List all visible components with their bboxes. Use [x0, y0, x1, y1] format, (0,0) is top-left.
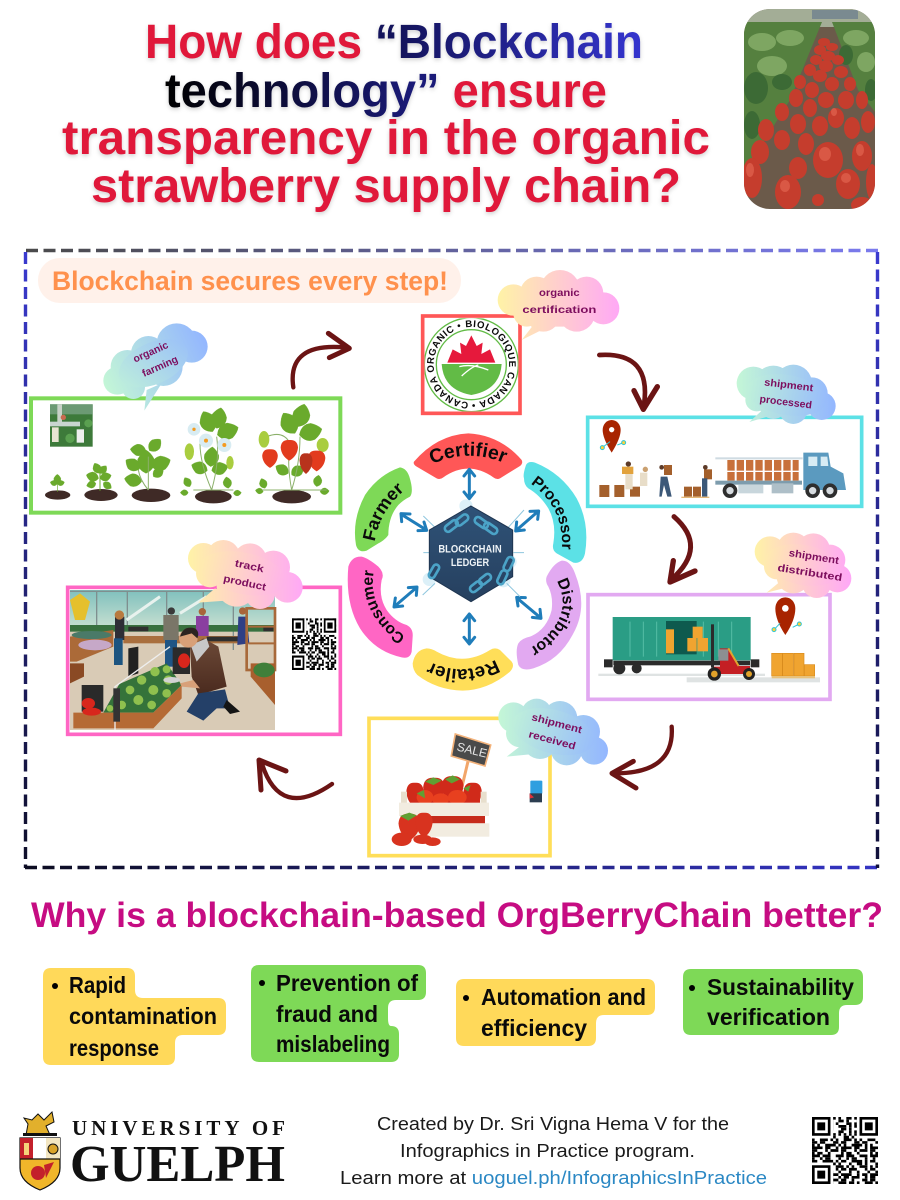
segment: Certifier: Certifier — [430, 442, 508, 462]
icon: strawberry growth stages — [45, 402, 330, 503]
icon: location pin — [600, 420, 626, 453]
icon: delivery truck — [715, 453, 846, 498]
heading: why better: Why is a blockchain-based OrgBerryChain better? — [31, 896, 883, 935]
benefit: prevention of fraud and mislabeling: mislabeling — [276, 1031, 390, 1057]
callout: track product — [188, 540, 303, 609]
segment: Distributor: Distributor — [532, 578, 574, 656]
icon: rail car — [598, 617, 820, 682]
callout: organic certification: organic — [539, 288, 580, 299]
panel: distributor step — [588, 595, 830, 699]
callout: shipment processed: processed — [759, 394, 812, 412]
callout: shipment distributed — [755, 533, 851, 598]
benefit: sustainability verification — [683, 969, 863, 1035]
callout: shipment processed — [737, 365, 836, 424]
benefit: rapid contamination response — [43, 968, 226, 1065]
panel: processor step — [588, 417, 862, 506]
icon: strawberry crate with sale sign: SALE — [455, 740, 489, 761]
callout: track product: product — [222, 574, 267, 594]
panel: consumer step — [68, 587, 340, 734]
banner: blockchain secures every step: Blockchain secures every step! — [52, 266, 448, 296]
benefit: rapid contamination response: contamination — [69, 1003, 217, 1029]
segment: Farmer: Farmer — [362, 483, 402, 541]
icon: strawberry crate with sale sign — [392, 734, 491, 846]
arrow: certifier to processor — [599, 355, 657, 409]
title: strawberry supply chain? — [91, 160, 681, 213]
callout: organic farming: farming — [141, 354, 180, 380]
benefit: automation and efficiency: efficiency — [481, 1015, 587, 1041]
title: technology” ensure — [165, 65, 607, 118]
icon: double-headed arrows — [394, 469, 541, 644]
benefit: rapid contamination response: response — [69, 1035, 159, 1061]
panel: dashed supply chain frame — [25, 250, 878, 868]
icon: forklift — [708, 624, 755, 681]
banner: blockchain secures every step — [38, 258, 461, 303]
callout: organic farming — [103, 323, 208, 411]
icon: Canada Organic logo: CANADA ORGANIC • BIOLOGIQUE CANADA • — [426, 320, 516, 408]
segment: Farmer — [354, 467, 412, 552]
benefit: prevention of fraud and mislabeling: Prevention of — [276, 970, 418, 996]
logo: University of Guelph — [20, 1112, 285, 1193]
icon: blockchain ledger hexagon: BLOCKCHAIN — [438, 544, 502, 556]
icon: QR code — [292, 618, 336, 670]
benefit: automation and efficiency: Automation and — [481, 984, 646, 1010]
panel: farmer step — [31, 398, 340, 513]
arrow: distributor to retailer — [612, 727, 672, 788]
callout: shipment received: shipment — [530, 712, 584, 736]
segment: Consumer: Consumer — [364, 570, 404, 643]
segment: Consumer — [348, 556, 413, 658]
callout: shipment processed: shipment — [763, 377, 814, 394]
icon: pallets — [772, 653, 815, 678]
chart: blockchain ledger wheel — [348, 433, 586, 691]
benefit: prevention of fraud and mislabeling — [251, 965, 426, 1062]
panel: certifier step — [420, 314, 522, 416]
segment: Retailer: Retailer — [426, 660, 500, 682]
icon: humidity sensor — [530, 781, 542, 802]
segment: Retailer — [412, 648, 513, 691]
icon: footer QR code — [812, 1117, 878, 1184]
benefit: prevention of fraud and mislabeling: fraud and — [276, 1001, 378, 1027]
callout: shipment distributed: distributed — [777, 563, 843, 584]
callout: organic farming: organic — [132, 340, 170, 365]
benefit: rapid contamination response: Rapid — [69, 972, 126, 998]
credit text: Infographics in Practice program. — [400, 1141, 695, 1161]
title — [62, 16, 710, 213]
segment: Processor — [524, 462, 586, 563]
title: How does “Blockchain — [145, 16, 643, 69]
callout: shipment distributed: shipment — [788, 548, 840, 567]
logo: University of Guelph: GUELPH — [70, 1136, 285, 1193]
callout: shipment received — [498, 699, 608, 765]
title: transparency in the organic — [62, 112, 710, 165]
arrow: processor to distributor — [670, 517, 695, 582]
segment: Distributor — [516, 560, 582, 670]
icon: blockchain ledger hexagon — [423, 499, 524, 602]
photo: strawberry field — [742, 9, 878, 213]
callout: shipment received: received — [527, 729, 577, 752]
panel: retailer step — [369, 718, 550, 856]
segment: Certifier — [414, 433, 522, 479]
icon: location pin — [772, 597, 801, 635]
arrow: farmer to certifier — [293, 333, 349, 387]
callout: organic certification: certification — [522, 305, 596, 316]
credit text — [340, 1114, 767, 1188]
icon: beehives and workers — [599, 461, 712, 498]
icon: griffin crest — [20, 1112, 60, 1190]
arrow: retailer to consumer — [259, 760, 332, 798]
logo: University of Guelph: UNIVERSITY OF — [72, 1116, 285, 1140]
benefit: sustainability verification: Sustainability — [707, 974, 854, 1000]
callout: organic certification — [498, 270, 619, 340]
icon: blockchain ledger hexagon: LEDGER — [451, 557, 489, 569]
benefit: automation and efficiency — [456, 979, 655, 1046]
icon: field sensor photo — [50, 404, 93, 447]
segment: Processor: Processor — [532, 476, 570, 550]
benefit: sustainability verification: verification — [707, 1004, 830, 1030]
image: greenhouse scene — [70, 590, 275, 730]
callout: track product: track — [234, 558, 265, 575]
credit text: Created by Dr. Sri Vigna Hema V for the — [377, 1114, 729, 1134]
credit text: Learn more at uoguel.ph/InfographicsInPractice — [340, 1168, 767, 1188]
